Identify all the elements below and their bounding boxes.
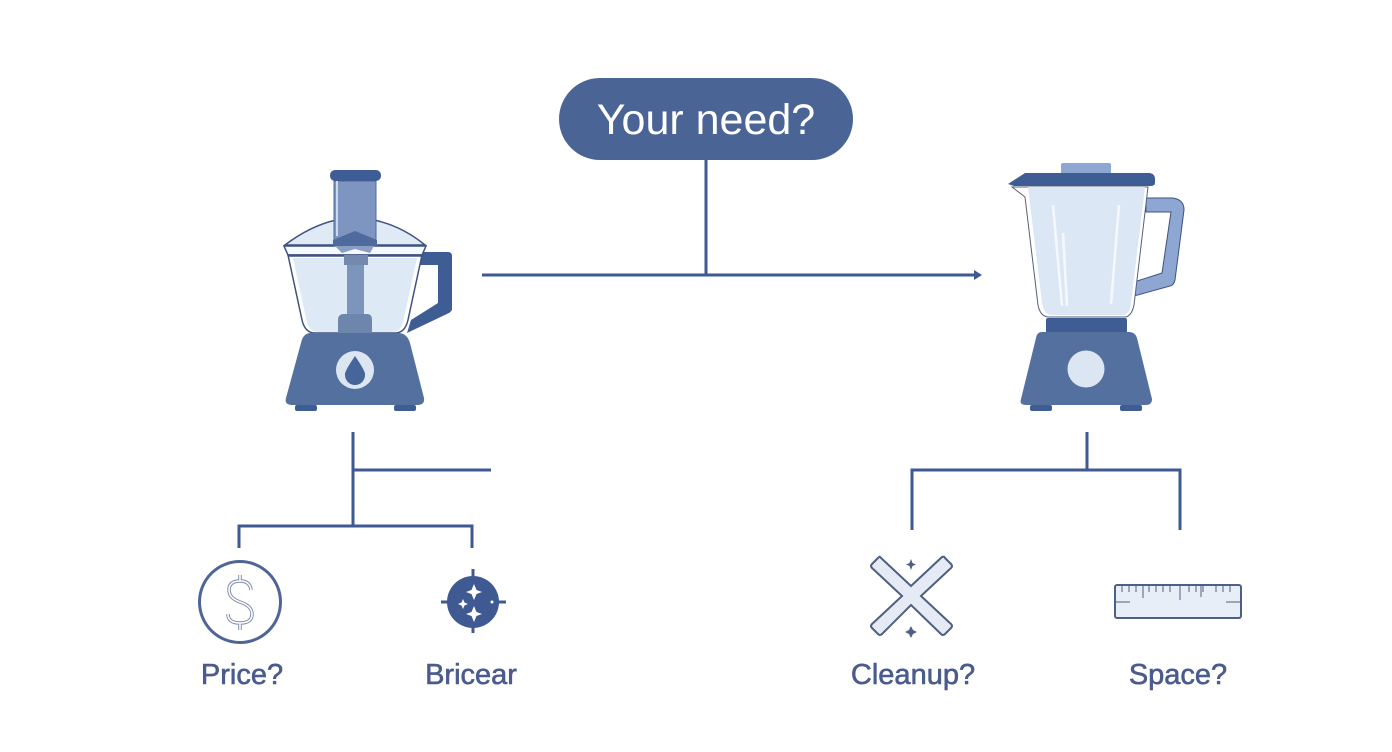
decision pill: Your need? — [559, 78, 853, 160]
left decision tree connectors — [239, 432, 491, 548]
label: Space?: Space? — [1129, 659, 1227, 691]
decision pill: Your need?: Your need? — [597, 96, 815, 144]
icon: crossed cleanup X — [871, 557, 952, 638]
icon: sparkle circle — [441, 569, 506, 633]
right decision tree connectors — [912, 432, 1180, 530]
icon: blender — [1008, 163, 1184, 411]
connector: pill to horizontal arrow — [482, 160, 982, 280]
label: Bricear: Bricear — [425, 659, 517, 691]
icon: dollar coin — [200, 562, 280, 642]
label: Cleanup?: Cleanup? — [851, 659, 975, 691]
icon: ruler — [1115, 585, 1241, 618]
label: Price?: Price? — [201, 659, 283, 691]
icon: food processor — [284, 170, 452, 411]
